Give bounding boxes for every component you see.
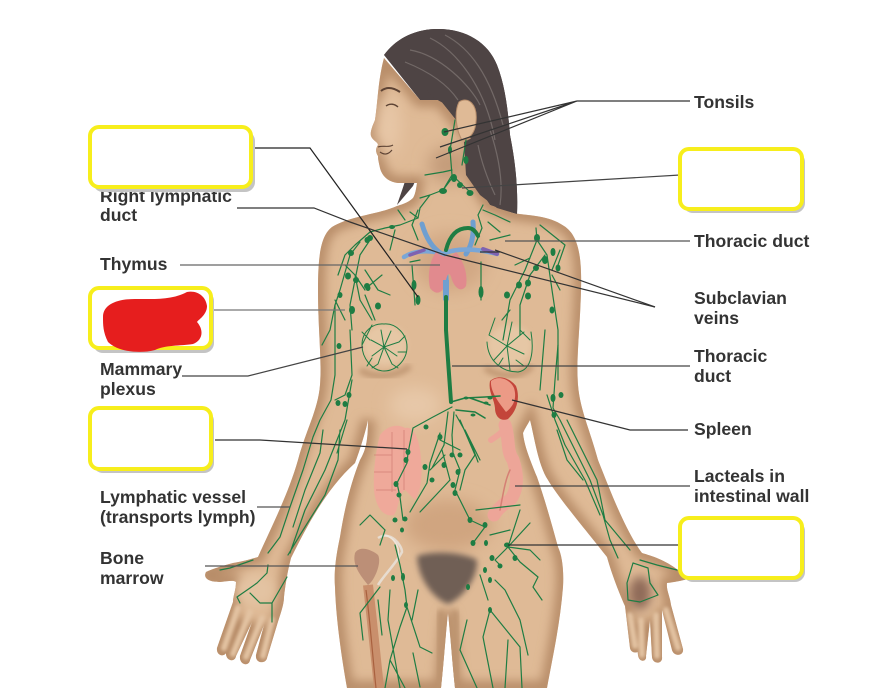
leader lines <box>180 101 690 566</box>
left hand <box>220 560 287 622</box>
veins: subclavian <box>404 222 497 300</box>
label: Thoracic duct lower: duct <box>694 366 731 386</box>
label: Lacteals in intestinal wall: Lacteals in <box>694 466 785 486</box>
hair highlights <box>405 35 503 205</box>
label box: top right blank <box>680 149 805 213</box>
thighs <box>460 510 542 688</box>
label: Mammary plexus: Mammary <box>100 359 182 379</box>
lymphatic vessels <box>220 120 677 688</box>
lymph nodes <box>336 128 564 613</box>
label: Right lymphatic duct: Right lymphatic <box>100 186 232 206</box>
hair back <box>384 29 517 214</box>
label: Bone marrow: Bone <box>100 548 144 568</box>
abdomen trunk <box>451 396 500 418</box>
right hand <box>627 560 677 602</box>
skin shading <box>205 58 697 688</box>
hair front <box>384 29 517 214</box>
label box: red scribble <box>90 288 214 353</box>
label: Lacteals in intestinal wall: intestinal wall <box>694 486 809 506</box>
neck and shoulders <box>410 120 470 218</box>
label box: intestine blank <box>90 408 214 473</box>
label: Spleen: Spleen <box>694 419 752 439</box>
figure: female body with lymphatic system <box>205 29 697 688</box>
thymus <box>429 252 467 293</box>
label: Lymphatic vessel: (transports lymph) <box>100 507 255 527</box>
femur bone <box>354 535 402 688</box>
face details <box>378 88 400 154</box>
mammary plexus left <box>362 324 407 371</box>
thoracic duct <box>446 228 478 402</box>
intestines: descending colon <box>491 425 516 515</box>
body skin <box>205 58 697 688</box>
ear <box>456 100 476 140</box>
mammary plexus right <box>487 318 532 372</box>
spleen <box>490 377 518 420</box>
pubic hair <box>417 553 477 604</box>
label: Subclavian veins: Subclavian <box>694 288 787 308</box>
right arm <box>540 330 630 558</box>
label: Right lymphatic duct: duct <box>100 205 137 225</box>
label: Lymphatic vessel: Lymphatic vessel <box>100 487 246 507</box>
label: Subclavian veins: veins <box>694 308 739 328</box>
label: Mammary plexus: plexus <box>100 379 156 399</box>
label: Bone marrow: marrow <box>100 568 164 588</box>
left arm <box>268 305 352 555</box>
label box: bottom right blank <box>680 518 805 582</box>
label box: top left blank <box>90 127 255 192</box>
label: Thoracic duct lower: Thoracic <box>694 346 767 366</box>
label: Thoracic duct upper: Thoracic duct <box>694 231 809 251</box>
sternal branches <box>410 260 481 305</box>
intestines: left colon <box>374 426 422 515</box>
label: Tonsils: Tonsils <box>694 92 754 112</box>
label: Thymus: Thymus <box>100 254 168 274</box>
